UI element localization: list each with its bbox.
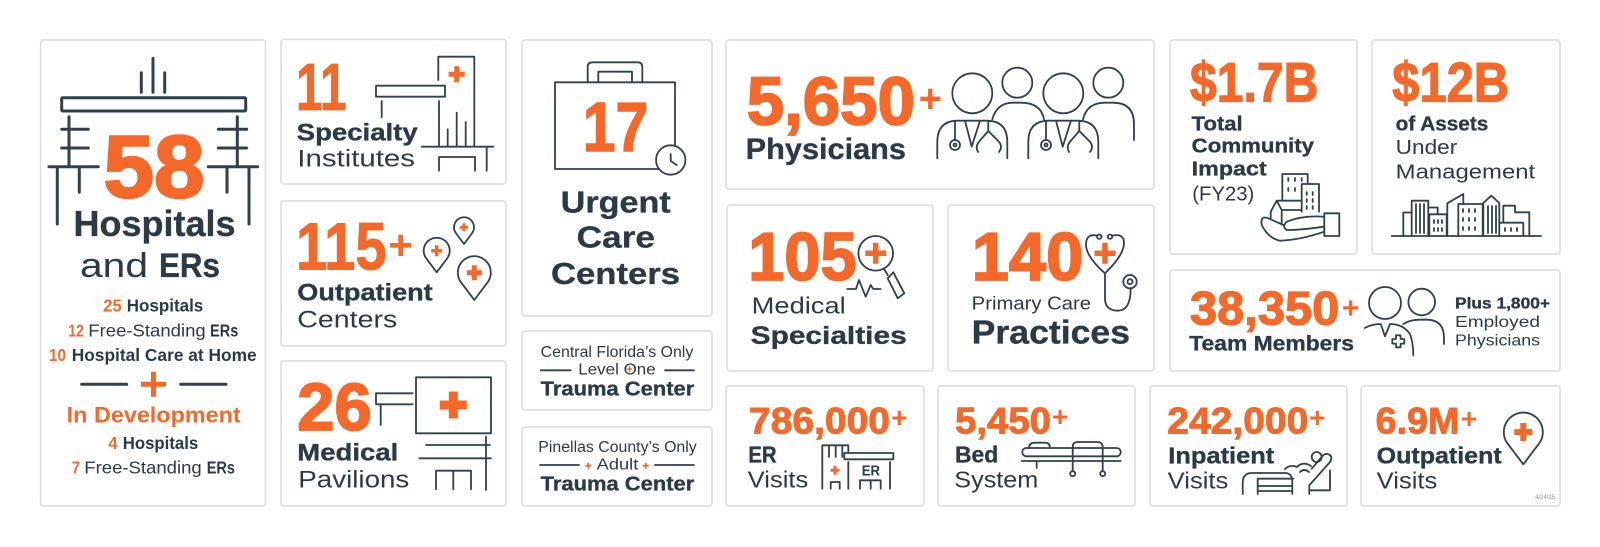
label: Centers: Centers — [297, 306, 397, 333]
label: Pavilions: Pavilions — [298, 467, 409, 494]
icon: magnifier with heartbeat — [847, 236, 904, 298]
icon: hand holding buildings — [1261, 174, 1339, 241]
text: Adult with lines and plus signs: Adult — [597, 457, 639, 474]
label: Inpatient: Inpatient — [1168, 443, 1275, 469]
label: Centers: Centers — [551, 256, 680, 291]
text: 12 free-standing ERs — [68, 321, 239, 341]
panel: 38,350+ team members — [1170, 270, 1560, 371]
heading: and ERs — [80, 247, 220, 285]
label: of Assets: of Assets — [1396, 113, 1488, 136]
label: Team Members: Team Members — [1189, 333, 1354, 356]
text: 7 free-standing ERs — [72, 457, 235, 477]
panel: 5,650+ physicians — [726, 40, 1154, 189]
icon: stethoscope with cross — [1086, 234, 1137, 311]
label: Community: Community — [1192, 134, 1315, 157]
text: 7 free-standing ERs: Free-Standing — [84, 457, 202, 477]
icon: three location pins — [424, 217, 491, 300]
label: Outpatient: Outpatient — [297, 280, 433, 307]
text: 12 free-standing ERs: Free-Standing — [88, 321, 206, 341]
plus sign: + — [1309, 402, 1325, 433]
number: 140: 140 — [972, 219, 1083, 295]
plus sign: + — [388, 221, 413, 268]
date stamp: 4/24/25 — [1535, 495, 1556, 501]
panel: 115+ outpatient centers — [281, 201, 506, 346]
icon: hospital outline — [49, 58, 258, 224]
number: $12B: $12B — [1392, 51, 1509, 114]
label: (FY23): (FY23) — [1192, 183, 1254, 206]
text: 25 hospitals: 25 — [103, 296, 122, 316]
icon: patient in recliner — [1243, 452, 1331, 494]
text: 12 free-standing ERs: 12 — [68, 321, 84, 341]
heading: Hospitals: Hospitals — [74, 203, 236, 244]
label: System: System — [954, 467, 1038, 493]
icon: hospital bed — [1022, 442, 1121, 476]
label: Practices: Practices — [972, 313, 1130, 350]
text: 7 free-standing ERs: 7 — [72, 457, 80, 477]
label: Physicians: Physicians — [746, 133, 906, 166]
label: Management: Management — [1396, 160, 1536, 183]
text: Plus 1,800+ employed physicians: Plus 1,800+ — [1455, 296, 1550, 313]
text: Trauma Center: Trauma Center — [541, 378, 694, 401]
icon: location pin with cross — [1504, 413, 1543, 464]
panel: 17 urgent care centers — [522, 40, 712, 316]
text: Adult with lines and plus signs — [540, 457, 694, 474]
number: 58: 58 — [104, 117, 204, 216]
text: Level One with lines: Level One — [578, 362, 656, 379]
label: ER: ER — [748, 442, 777, 468]
panel: level one trauma center — [522, 331, 712, 410]
text: Plus 1,800+ employed physicians: Employed — [1455, 314, 1540, 331]
plus sign: + — [1461, 403, 1477, 434]
number: 5,650: 5,650 — [747, 63, 915, 139]
text: Trauma Center: Trauma Center — [541, 473, 694, 496]
label: Bed: Bed — [955, 442, 998, 468]
label: Primary Care: Primary Care — [972, 293, 1091, 313]
panel: 26 medical pavilions — [281, 361, 506, 506]
number: 786,000: 786,000 — [749, 401, 890, 442]
label: Specialty: Specialty — [297, 120, 418, 147]
plus sign: + — [1052, 401, 1068, 432]
panel: $12B assets under management — [1372, 40, 1560, 254]
panel: 786,000+ ER visits — [726, 386, 924, 506]
number: 242,000: 242,000 — [1167, 401, 1308, 442]
number: 115: 115 — [296, 209, 387, 284]
panel: $1.7B total community impact — [1170, 40, 1357, 254]
text: 10 hospital care at home: Hospital Care at Home — [72, 345, 257, 365]
label: Specialties: Specialties — [751, 322, 907, 350]
text: Plus 1,800+ employed physicians: Physicians — [1455, 332, 1540, 349]
icon: emergency room building — [822, 445, 893, 489]
panel: 242,000+ inpatient visits — [1150, 386, 1347, 506]
plus sign: + — [919, 77, 942, 121]
icon: physicians group — [937, 68, 1134, 158]
icon: emergency room building: ER — [862, 463, 880, 479]
icon: briefcase with clock — [555, 62, 685, 175]
panel: 6.9M+ outpatient visits — [1361, 386, 1560, 506]
plus sign: + — [891, 402, 907, 433]
icon: specialty building — [376, 57, 493, 171]
panel: 11 specialty institutes — [281, 40, 506, 184]
text: 25 hospitals: Hospitals — [127, 296, 204, 316]
panel: 5,450+ bed system — [938, 386, 1135, 506]
plus sign: + — [1342, 292, 1359, 325]
number: 17: 17 — [583, 88, 648, 166]
text: Central Florida's Only: Central Florida’s Only — [541, 344, 694, 361]
panel: 105 medical specialties — [727, 205, 933, 371]
icon: two team members — [1365, 287, 1444, 355]
label: Care: Care — [577, 219, 655, 254]
number: 105: 105 — [748, 219, 857, 295]
label: Visits: Visits — [748, 467, 808, 493]
label: Visits: Visits — [1168, 468, 1228, 494]
label: Outpatient: Outpatient — [1377, 443, 1502, 469]
text: Plus 1,800+ employed physicians — [1455, 296, 1550, 349]
text: 4 hospitals: Hospitals — [123, 433, 199, 453]
label: Institutes: Institutes — [297, 146, 415, 173]
panel: 140 primary care practices — [948, 205, 1154, 371]
heading: and ERs: ERs — [159, 247, 220, 285]
text: 7 free-standing ERs: ERs — [207, 457, 235, 477]
number: 5,450: 5,450 — [955, 401, 1051, 442]
label: Total: Total — [1192, 113, 1243, 136]
number: 38,350: 38,350 — [1190, 282, 1339, 335]
label: Urgent: Urgent — [561, 185, 671, 220]
text: Pinellas County's Only: Pinellas County’s Only — [538, 439, 697, 456]
heading: In Development: In Development — [67, 403, 241, 428]
number: 26: 26 — [297, 370, 372, 445]
label: Medical: Medical — [297, 440, 398, 467]
icon: pavilion building — [376, 377, 491, 490]
text: 10 hospital care at home: 10 — [49, 345, 66, 365]
text: Level One with lines — [541, 362, 694, 379]
text: 12 free-standing ERs: ERs — [210, 321, 239, 341]
label: Impact: Impact — [1192, 158, 1267, 181]
icon: city skyline — [1392, 194, 1541, 236]
number: $1.7B: $1.7B — [1190, 51, 1318, 114]
panel: 58 hospitals and ERs — [40, 40, 266, 506]
panel: adult trauma center — [522, 427, 712, 506]
text: 4 hospitals: 4 — [108, 433, 118, 453]
divider with plus — [82, 372, 226, 397]
label: Under: Under — [1396, 136, 1457, 159]
heading: and ERs: and — [80, 247, 148, 285]
label: Medical: Medical — [752, 292, 846, 318]
number: 11: 11 — [296, 50, 347, 125]
number: 6.9M: 6.9M — [1376, 401, 1459, 442]
label: Visits: Visits — [1377, 468, 1437, 494]
